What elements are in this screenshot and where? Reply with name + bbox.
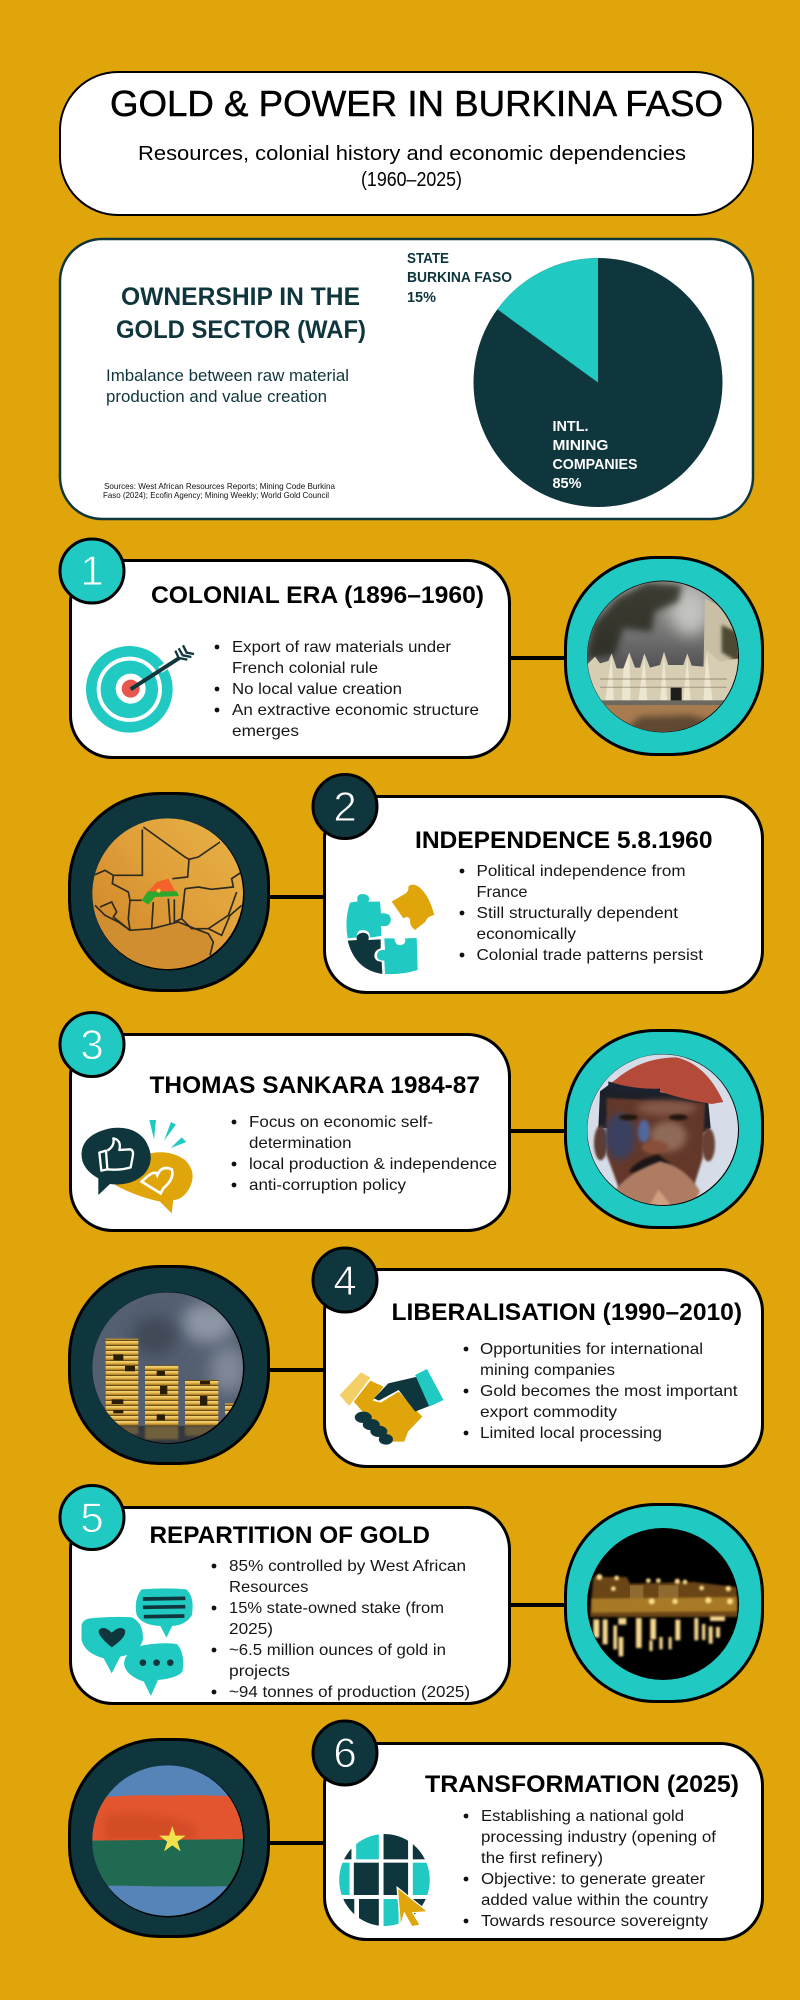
- bullet list: Focus on economic self-: [249, 1114, 433, 1131]
- heading: LIBERALISATION (1990–2010): [392, 1299, 742, 1326]
- photo: mosque: [587, 581, 738, 732]
- number badge 3: 3: [80, 1021, 104, 1068]
- heading: ownership: GOLD SECTOR (WAF): [116, 316, 366, 344]
- photo: burkina faso flag: [92, 1765, 243, 1916]
- pie chart: [474, 258, 722, 507]
- panel: thomas sankara: [60, 1012, 510, 1230]
- bullet list: 85% controlled by West African: [229, 1558, 466, 1575]
- bullet list: [212, 1558, 470, 1701]
- heading: THOMAS SANKARA 1984-87: [150, 1072, 480, 1099]
- description text: Imbalance between raw material: [106, 366, 349, 385]
- icon: chat bubbles: [82, 1588, 193, 1696]
- panel: independence: [313, 774, 762, 992]
- bullet list: ~6.5 million ounces of gold in: [229, 1642, 446, 1659]
- panel: transformation: [313, 1721, 762, 1940]
- connector 2: [268, 895, 326, 899]
- bullet list: French colonial rule: [232, 660, 378, 677]
- bullet list: [460, 863, 704, 964]
- connector 6: [268, 1841, 326, 1845]
- icon: globe with cursor: [337, 1833, 432, 1927]
- bullet list: Colonial trade patterns persist: [476, 947, 704, 964]
- title: GOLD & POWER IN BURKINA FASO: [110, 83, 723, 124]
- heading: INDEPENDENCE 5.8.1960: [415, 827, 712, 854]
- number badge 6: [313, 1721, 377, 1785]
- pie label: state: 15%: [407, 289, 436, 306]
- photo: thomas sankara: [587, 1054, 738, 1205]
- number badge 2: [313, 774, 377, 838]
- bullet list: mining companies: [480, 1362, 615, 1379]
- heading: ownership: OWNERSHIP IN THE: [121, 283, 360, 311]
- subtitle: Resources, colonial history and economic dependencies: [138, 143, 686, 165]
- number badge 5: 5: [80, 1494, 104, 1541]
- number badge 5: [60, 1486, 124, 1550]
- connector 1: [509, 656, 567, 660]
- pie label: mining companies: [552, 418, 638, 492]
- photo ring: refinery: [566, 1504, 762, 1702]
- pie label: mining companies: 85%: [552, 475, 582, 492]
- photo: refinery at night: [588, 1529, 738, 1658]
- connector 3: [509, 1129, 567, 1133]
- bullet list: Towards resource sovereignty: [481, 1913, 708, 1930]
- bullet list: anti-corruption policy: [249, 1177, 406, 1194]
- bullet list: the first refinery): [481, 1850, 603, 1867]
- bullet list: Establishing a national gold: [481, 1808, 684, 1825]
- bullet list: processing industry (opening of: [481, 1829, 717, 1846]
- subtitle: (1960–2025): [361, 169, 462, 191]
- pie label: state: BURKINA FASO: [407, 269, 512, 286]
- bullet list: [464, 1808, 717, 1930]
- connector 5: [509, 1603, 567, 1607]
- bullet list: emerges: [232, 723, 299, 740]
- bullet list: 15% state-owned stake (from: [229, 1600, 444, 1617]
- icon: puzzle: [346, 885, 434, 974]
- sources: Faso (2024); Ecofin Agency; Mining Weekly; World Gold Council: [103, 490, 329, 500]
- number badge 1: [60, 539, 124, 603]
- pie label: mining companies: COMPANIES: [552, 456, 638, 473]
- description text: [106, 366, 349, 406]
- photo: coin stacks: [92, 1292, 243, 1443]
- number badge 4: 4: [333, 1257, 357, 1304]
- bullet list: No local value creation: [232, 681, 402, 698]
- photo ring: map: [70, 794, 268, 990]
- photo ring: flag: [70, 1740, 268, 1936]
- photo ring: mosque: [566, 558, 762, 754]
- panel: title card: [60, 72, 753, 215]
- bullet list: An extractive economic structure: [232, 702, 479, 719]
- heading: COLONIAL ERA (1896–1960): [151, 582, 484, 609]
- bullet list: Political independence from: [476, 863, 686, 880]
- description text: production and value creation: [106, 387, 327, 406]
- icon: handshake: [340, 1369, 443, 1445]
- panel: colonial era: [60, 539, 510, 758]
- panel: ownership in the gold sector: [60, 239, 753, 519]
- pie label: mining companies: INTL.: [552, 418, 588, 435]
- bullet list: Opportunities for international: [480, 1341, 703, 1358]
- icon: target: [86, 645, 194, 733]
- bullet list: 2025): [229, 1621, 273, 1638]
- photo ring: sankara: [566, 1030, 762, 1228]
- number badge 2: 2: [333, 783, 357, 830]
- pie label: state: [407, 250, 512, 306]
- bullet list: [464, 1341, 738, 1442]
- number badge 4: [313, 1248, 377, 1312]
- panel: repartition of gold: [60, 1486, 510, 1704]
- connector 4: [268, 1368, 326, 1372]
- bullet list: export commodity: [480, 1404, 617, 1421]
- bullet list: projects: [229, 1663, 290, 1680]
- pie label: state: STATE: [407, 250, 449, 267]
- number badge 1: 1: [80, 547, 104, 594]
- photo ring: coins: [70, 1266, 268, 1464]
- sources: [103, 481, 335, 500]
- number badge 6: 6: [333, 1729, 357, 1776]
- bullet list: Gold becomes the most important: [480, 1383, 738, 1400]
- bullet list: Still structurally dependent: [476, 905, 679, 922]
- bullet list: [215, 639, 479, 740]
- bullet list: France: [476, 884, 528, 901]
- heading: REPARTITION OF GOLD: [150, 1522, 430, 1549]
- pie label: mining companies: MINING: [552, 437, 608, 454]
- bullet list: Objective: to generate greater: [481, 1871, 706, 1888]
- bullet list: [232, 1114, 497, 1194]
- bullet list: determination: [249, 1135, 352, 1152]
- number badge 3: [60, 1012, 124, 1076]
- subtitle: [138, 143, 686, 191]
- icon: feedback bubbles: [82, 1120, 193, 1213]
- heading: TRANSFORMATION (2025): [425, 1771, 739, 1798]
- sources: Sources: West African Resources Reports; Mining Code Burkina: [104, 481, 335, 491]
- panel: liberalisation: [313, 1248, 762, 1466]
- bullet list: Limited local processing: [480, 1425, 662, 1442]
- bullet list: Export of raw materials under: [232, 639, 452, 656]
- heading: ownership: [116, 283, 366, 344]
- bullet list: Resources: [229, 1579, 308, 1596]
- bullet list: economically: [476, 926, 576, 943]
- bullet list: added value within the country: [481, 1892, 708, 1909]
- bullet list: ~94 tonnes of production (2025): [229, 1684, 470, 1701]
- photo: map of west africa: [92, 818, 243, 969]
- bullet list: local production & independence: [249, 1156, 497, 1173]
